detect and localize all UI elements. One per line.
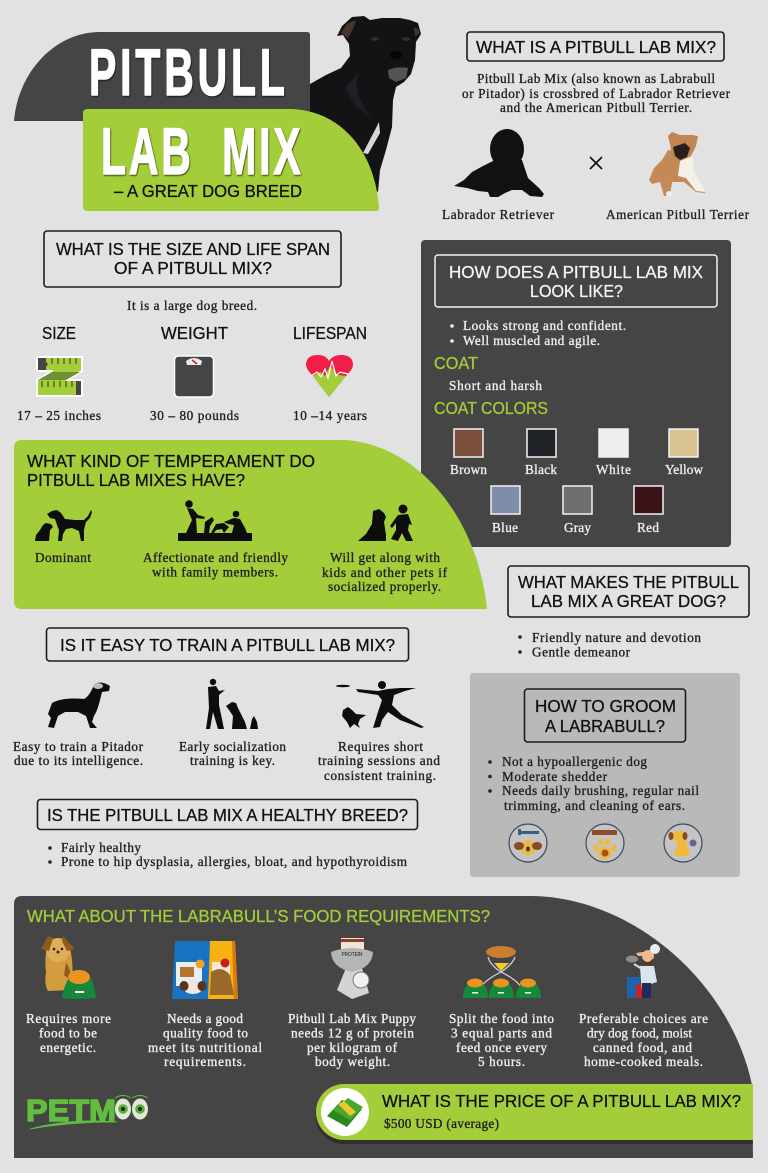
icon: nail clipping paw: [586, 824, 624, 862]
intro text: [462, 71, 731, 115]
icon: trainer with dog and cat: [206, 679, 258, 729]
list: health: [48, 840, 408, 869]
panel: temperament: Affectionate and friendly: [143, 550, 288, 565]
stat: weight: WEIGHT: [161, 323, 228, 343]
panel: temperament: socialized properly.: [328, 579, 441, 594]
intro text: or Pitador) is crossbred of Labrador Retriever: [462, 86, 731, 101]
heading: training: [46, 628, 408, 661]
icon: brush: [509, 824, 547, 862]
stat: lifespan: LIFESPAN: [293, 323, 367, 343]
text: food columns: Requires more: [26, 1011, 111, 1026]
panel: temperament: [14, 440, 487, 609]
swatch: white: [596, 429, 631, 477]
text: training columns: Early socialization: [179, 739, 286, 754]
icon: family playing with dog: [178, 500, 252, 541]
panel: temperament: Dominant: [35, 550, 91, 565]
text: food columns: needs 12 g of protein: [291, 1026, 414, 1040]
list: grooming: trimming, and cleaning of ears.: [504, 798, 685, 813]
stat: weight: 30 – 80 pounds: [150, 408, 239, 423]
text: training columns: Requires short: [338, 739, 423, 754]
title banner: dark: [14, 32, 310, 121]
heading: healthy breed: IS THE PITBULL LAB MIX A HEALTHY BREED?: [47, 805, 408, 825]
text: food columns: quality food to: [163, 1026, 248, 1040]
subtitle: – A GREAT DOG BREED: [114, 181, 302, 201]
heading: coat: COAT: [434, 353, 478, 373]
label: Labrador Retriever: Labrador Retriever: [442, 207, 555, 222]
icon: big and small dog: [35, 510, 92, 541]
swatch: gray: Gray: [564, 520, 591, 535]
bullet list: Well muscled and agile.: [463, 333, 600, 348]
swatch: black: Black: [525, 462, 557, 477]
icon: cross: [590, 157, 602, 169]
heading: great dog: WHAT MAKES THE PITBULL: [518, 572, 739, 592]
panel: temperament: WHAT KIND OF TEMPERAMENT DO: [27, 451, 315, 471]
swatch: blue: Blue: [492, 520, 518, 535]
swatch: gray: [563, 486, 592, 535]
text: training columns: Easy to train a Pitador: [13, 739, 144, 754]
icon: smart dog: [48, 683, 110, 728]
stat: weight: [150, 323, 239, 423]
swatch: black: [525, 429, 557, 477]
text: food columns: dry dog food, moist: [587, 1026, 692, 1040]
swatch: yellow: [665, 429, 703, 477]
bullet list: Looks strong and confident.: [463, 318, 626, 333]
panel: how does it look like: HOW DOES A PITBULL LAB MIX: [449, 262, 703, 282]
text: food columns: per kilogram of: [307, 1040, 398, 1055]
text: food columns: 5 hours.: [478, 1054, 525, 1069]
text: training columns: training is key.: [190, 753, 275, 768]
text: training columns: due to its intelligence.: [14, 753, 143, 768]
list: great dog: Gentle demeanor: [532, 644, 631, 660]
heading: what is a pitbull lab mix: WHAT IS A PITBULL LAB MIX?: [476, 37, 716, 57]
swatch: red: [634, 486, 663, 535]
panel: temperament: kids and other pets if: [322, 565, 448, 580]
list: grooming: Not a hypoallergenic dog: [502, 754, 647, 769]
text: food columns: Preferable choices are: [579, 1011, 708, 1026]
icon: dog and kid: [358, 504, 413, 541]
title banner: green: [83, 109, 379, 211]
intro text: and the American Pitbull Terrier.: [500, 100, 692, 115]
text: food columns: body weight.: [315, 1054, 390, 1069]
swatch: red: Red: [637, 520, 659, 535]
text: food columns: meet its nutritional: [148, 1040, 262, 1055]
logo: Petmoo: [26, 1093, 148, 1129]
price banner: $500 USD (average): [384, 1116, 499, 1131]
panel: grooming: HOW TO GROOM: [535, 696, 676, 716]
stat: lifespan: [293, 323, 367, 423]
list: health: Fairly healthy: [61, 840, 141, 855]
text: food columns: canned food, and: [593, 1040, 692, 1055]
label: American Pitbull Terrier: American Pitbull Terrier: [606, 207, 750, 222]
intro text: Pitbull Lab Mix (also known as Labrabull: [477, 71, 715, 86]
text: food columns: [26, 1011, 708, 1069]
swatch: yellow: Yellow: [665, 462, 703, 477]
photo: black pitbull: [300, 16, 421, 192]
list: great dog: [518, 630, 701, 660]
icon: frisbee and dog: [336, 681, 424, 728]
heading: size and life span: [44, 231, 341, 287]
title: LAB MIX: LAB MIX: [101, 114, 301, 188]
swatch: blue: [491, 486, 520, 535]
price banner: [316, 1084, 753, 1144]
icon: money: [327, 1098, 363, 1127]
swatch: white: White: [596, 462, 631, 477]
heading: great dog: [508, 566, 749, 617]
text: food columns: food to be: [39, 1026, 97, 1040]
heading: training: IS IT EASY TO TRAIN A PITBULL LAB MIX?: [60, 635, 395, 655]
list: grooming: Needs daily brushing, regular nail: [502, 783, 699, 798]
text: food columns: 3 equal parts and: [451, 1026, 552, 1040]
swatch: brown: [450, 429, 487, 477]
heading: coat colors: COAT COLORS: [434, 398, 548, 418]
panel: temperament: PITBULL LAB MIXES HAVE?: [27, 470, 245, 490]
panel: food requirements: [14, 896, 753, 1158]
text: training columns: training sessions and: [318, 753, 440, 768]
panel: how does it look like: [421, 240, 731, 547]
title: PITBULL: PITBULL: [89, 35, 285, 109]
list: great dog: Friendly nature and devotion: [532, 630, 701, 645]
panel: food requirements: WHAT ABOUT THE LABRABULL’S FOOD REQUIREMENTS?: [27, 906, 490, 926]
text: food columns: Split the food into: [449, 1011, 554, 1026]
list: health: Prone to hip dysplasia, allergies, bloat, and hypothyroidism: [61, 854, 408, 869]
panel: grooming: A LABRABULL?: [545, 716, 665, 736]
photo: tan pitbull puppy: [649, 132, 705, 197]
icon: protein scale: [331, 938, 373, 999]
heading: great dog: LAB MIX A GREAT DOG?: [531, 591, 726, 611]
heading: what is a pitbull lab mix: [467, 32, 724, 61]
stat: size: 17 – 25 inches: [17, 408, 101, 423]
text: food columns: Pitbull Lab Mix Puppy: [288, 1011, 416, 1026]
bullet list: [450, 318, 626, 348]
icon: dog with bowl: [41, 936, 96, 999]
stat: size: [17, 323, 101, 423]
icon: hourglass with bowls: [463, 946, 541, 998]
text: food columns: energetic.: [40, 1040, 96, 1055]
icon: chef with food: [626, 944, 660, 998]
text: training columns: consistent training.: [324, 768, 436, 783]
text: food columns: home-cooked meals.: [584, 1054, 703, 1069]
icon: dog food bags: [172, 941, 238, 999]
text: food columns: feed once every: [456, 1040, 547, 1055]
price banner: WHAT IS THE PRICE OF A PITBULL LAB MIX?: [382, 1091, 741, 1111]
panel: temperament: Will get along with: [330, 550, 440, 565]
heading: size and life span: OF A PITBULL MIX?: [114, 258, 272, 278]
heading: healthy breed: [38, 800, 418, 830]
panel: how does it look like: LOOK LIKE?: [530, 281, 623, 301]
panel: grooming: [470, 673, 740, 877]
stat: lifespan: 10 –14 years: [293, 408, 367, 423]
icon: ear cleaning: [664, 824, 702, 862]
text: coat: Short and harsh: [449, 378, 542, 393]
text: food columns: requirements.: [164, 1054, 246, 1069]
text: large breed: It is a large dog breed.: [127, 298, 257, 313]
text: food columns: Needs a good: [167, 1011, 243, 1026]
panel: temperament: with family members.: [152, 564, 278, 580]
logo: Petmoo: PETM: [26, 1093, 116, 1128]
icon: protein scale: PROTEIN: [342, 952, 363, 958]
text: training columns: [13, 739, 440, 783]
list: grooming: [488, 754, 699, 813]
heading: size and life span: WHAT IS THE SIZE AND LIFE SPAN: [56, 239, 330, 259]
stat: size: SIZE: [42, 323, 76, 343]
photo: black labrador puppy: [454, 129, 544, 197]
swatch: brown: Brown: [450, 462, 487, 477]
list: grooming: Moderate shedder: [502, 769, 608, 784]
